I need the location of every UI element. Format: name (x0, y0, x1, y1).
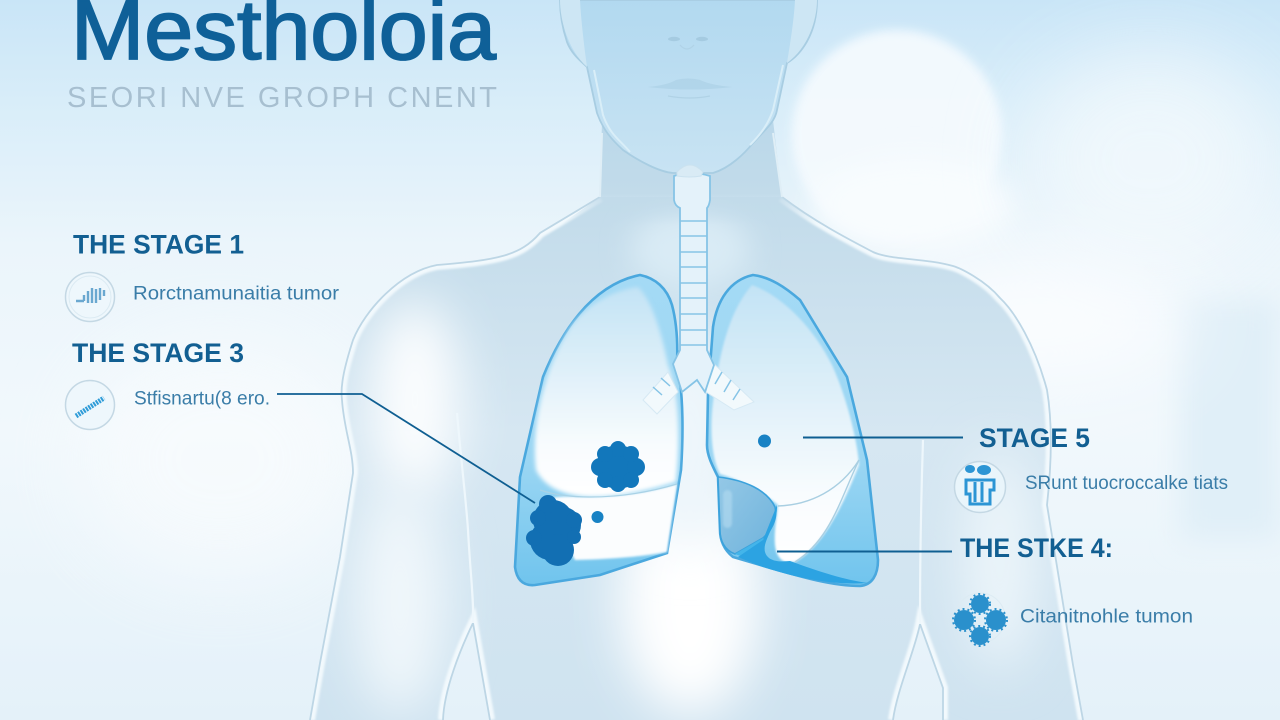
bronchus branches (643, 362, 754, 414)
heading: stage 1: THE STAGE 1 (73, 230, 244, 260)
upper lobe (535, 287, 678, 497)
body outline (310, 197, 1083, 720)
torso and arms (310, 197, 1083, 720)
tumor: peripheral mass (526, 495, 582, 566)
trachea (643, 165, 754, 414)
nose (668, 37, 708, 49)
panel: stage 1 (66, 230, 340, 322)
mouth (648, 78, 732, 98)
lower lobe (545, 484, 677, 560)
heading: stage 3: THE STAGE 3 (72, 338, 244, 368)
neck (560, 120, 820, 225)
head (560, 0, 817, 173)
upper lobe (712, 285, 859, 562)
heading: stage 5: STAGE 5 (979, 423, 1090, 453)
text: stage 3: Stfisnartu(8 ero. (134, 388, 270, 410)
icon: stage 1 (66, 272, 114, 322)
icon: stage 5 (954, 462, 1006, 512)
panel: stage 4 (953, 533, 1193, 646)
body highlights (310, 197, 1083, 720)
tumor: central mass (591, 441, 645, 492)
arm inner lines (457, 413, 923, 624)
icon: stage 4 (953, 593, 1007, 646)
panel: stage 3 (66, 338, 270, 430)
human body silhouette (310, 0, 1083, 720)
effusion pocket (718, 477, 868, 584)
text: stage 4: Citanitnohle tumon (1020, 606, 1193, 628)
text: stage 1: Rorctnamunaitia tumor (133, 284, 340, 304)
panel: stage 5 (954, 423, 1228, 512)
subtitle: SEORI NVE GROPH CNENT (67, 82, 497, 114)
left lung (515, 275, 682, 585)
right lung (707, 275, 878, 586)
heading: stage 4: THE STKE 4: (960, 533, 1113, 563)
icon: stage 3 (66, 380, 114, 430)
text: stage 5: SRunt tuocroccalke tiats (1025, 473, 1228, 494)
tumor: small nodule (592, 511, 604, 523)
small nodule (758, 434, 771, 448)
leader lines (277, 394, 963, 552)
